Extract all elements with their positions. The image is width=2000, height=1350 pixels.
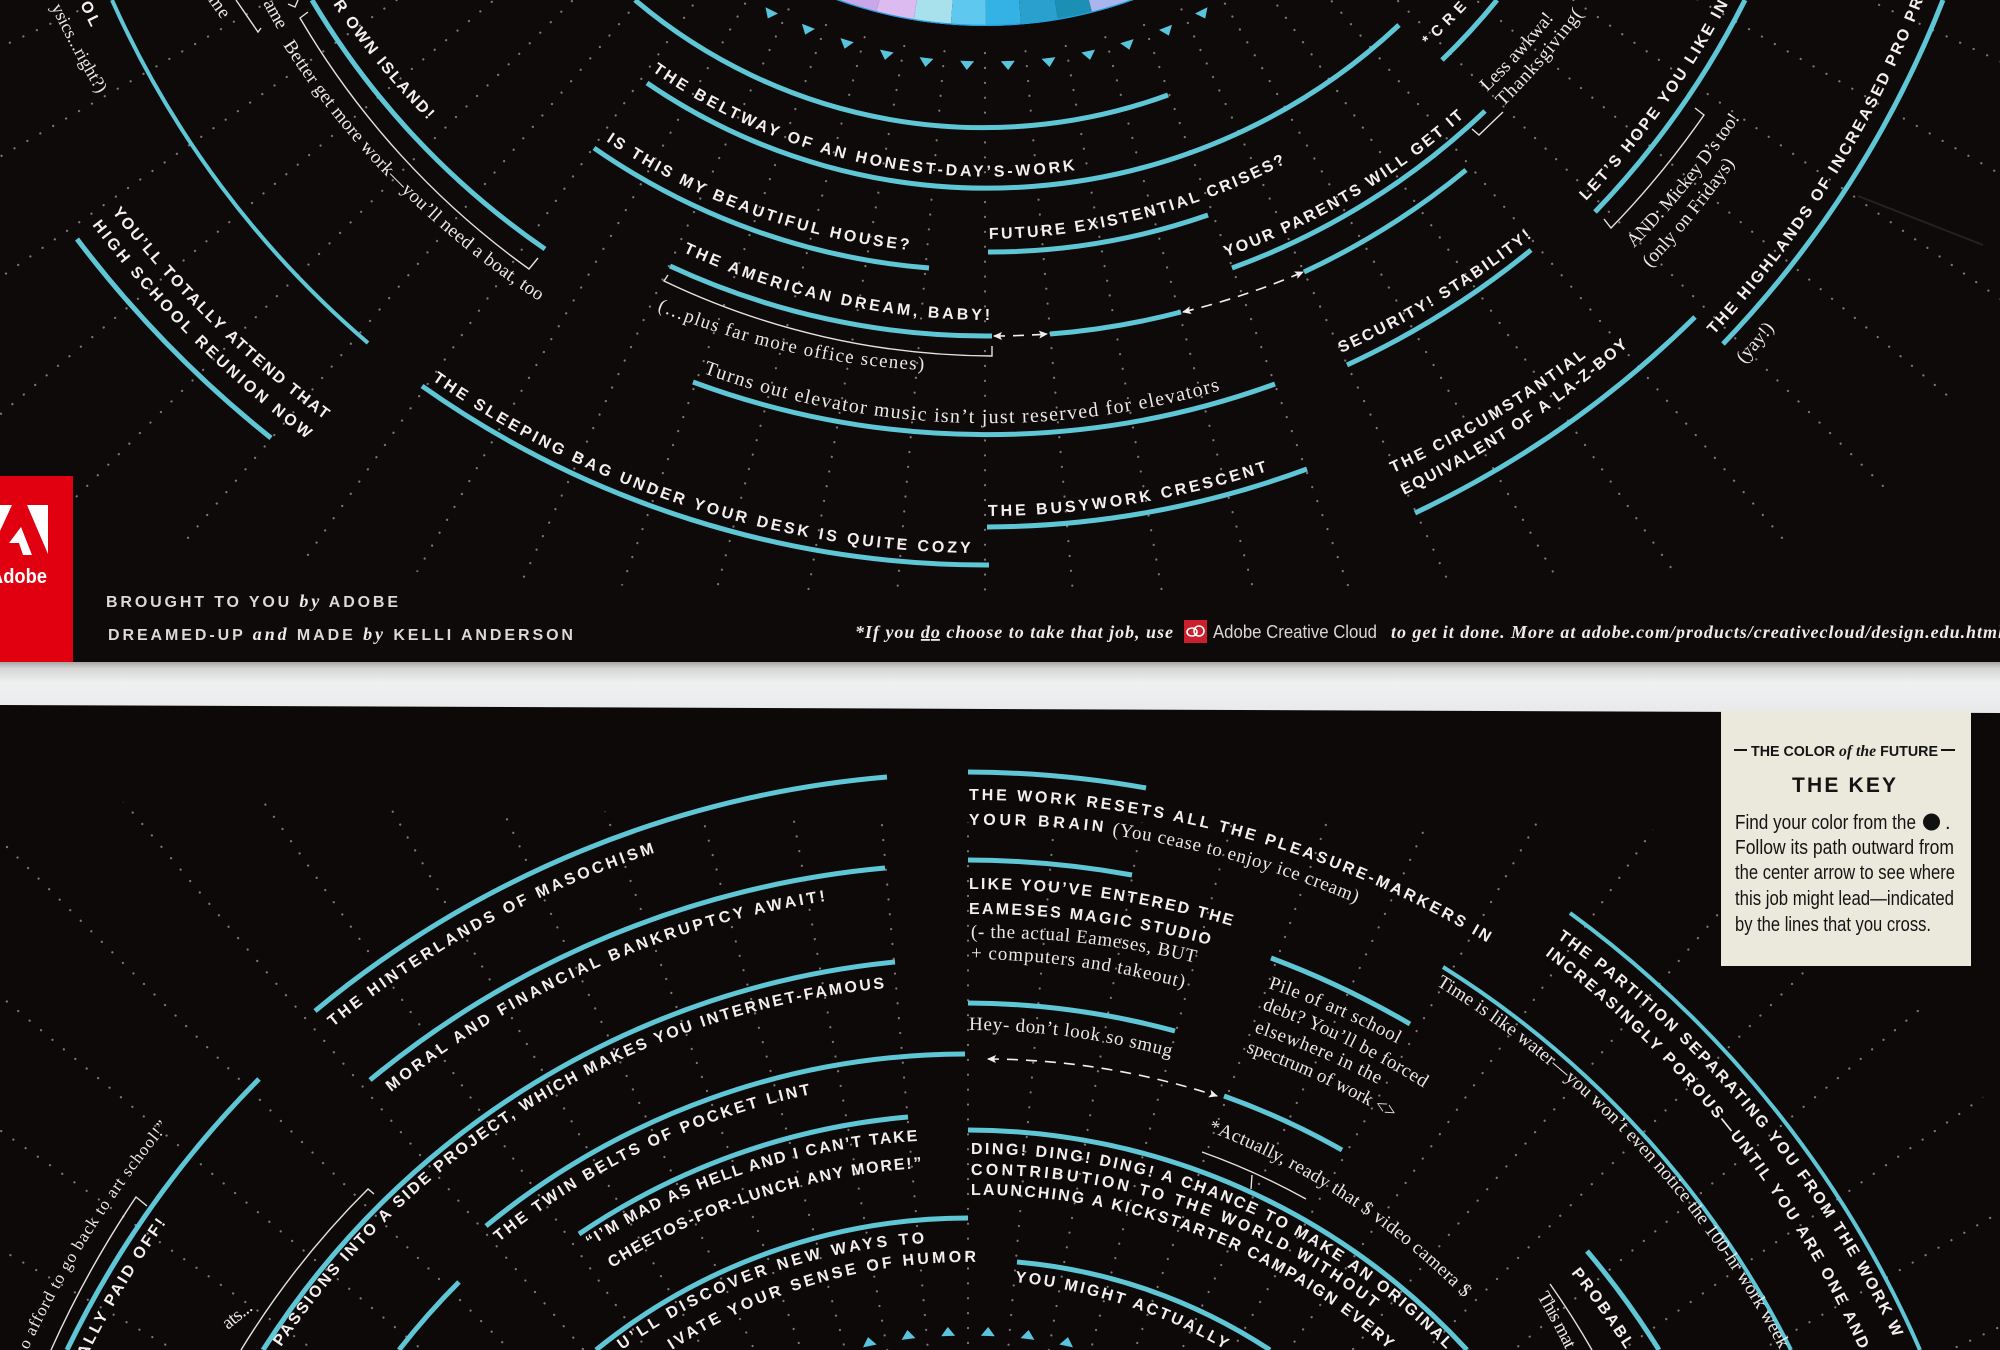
note: time is like water: Time is like water—you won’t even notice the 100-hr work week [1433,971,1794,1350]
note: office scenes: (…plus far more office scenes) [658,300,924,374]
arc: hey don't look so smug [968,1003,1175,1031]
label: your own island: R OWN ISLAND! [334,0,435,119]
label: side project: PASSIONS INTO A SIDE PROJECT, WHICH MAKES YOU INTERNET-FAMOUS [272,978,884,1346]
note: better get more work: Better get more work—you’ll need a boat, too [283,38,542,300]
credit: dreamed up and made by kelli anderson: DREAMED-UP and MADE by KELLI ANDERSON [108,624,573,644]
arc: lower right segment [1304,170,1466,272]
arc: is this my beautiful house [594,148,929,268]
label: probably: PROBABL [1568,1265,1637,1350]
arc: finally paid off [67,1079,259,1350]
label: twin belts: THE TWIN BELTS OF POCKET LINT [492,1084,808,1240]
note: ice cream: (You cease to enjoy ice cream) [1111,819,1362,908]
arc: time is like water [1443,967,1791,1350]
arc: hinterlands [315,777,887,1011]
triangle ring, lower wheel [861,1327,1075,1347]
arc: pile of art school debt [1271,958,1410,1024]
label: your parents: YOUR PARENTS WILL GET IT [1222,108,1462,256]
arc: security stability [1347,250,1531,365]
note: physics right: ysics...right?) [48,4,106,93]
footnote: if you do choose: *If you do choose to take that job, use [855,622,1173,642]
bracket: paid off note [51,1197,147,1350]
arc: let's hope [1595,0,1745,212]
arc: the work resets [968,772,1146,788]
bracket: island note [300,12,538,269]
note: video camera: *Actually, ready that $ video camera $ [1206,1116,1475,1302]
note: afford art school: o afford to go back to art school!” [22,1120,162,1348]
color wheel pie [836,0,1134,26]
label: mad as hell line two: CHEETOS-FOR-LUNCH ANY MORE!” [608,1157,920,1266]
label: your brain: YOUR BRAIN [969,812,1104,836]
label: moral bankruptcy: MORAL AND FINANCIAL BANKRUPTCY AWAIT! [385,890,824,1092]
scratch on paper [1858,196,1983,245]
label: ding line two: CONTRIBUTION TO THE WORLD WITHOUT [971,1162,1381,1312]
label: circumstantial line one: THE CIRCUMSTANTIAL [1388,352,1586,472]
arrow: dashed lower [988,1059,1217,1096]
body line 4: this job might lead—indicated [1735,888,1954,910]
label: pleasure markers: THE WORK RESETS ALL THE PLEASURE-MARKERS IN [969,789,1492,942]
bracket: small right [288,0,298,7]
label: discover line one: U’LL DISCOVER NEW WAYS TO [616,1232,924,1348]
bracket: american dream note [664,275,992,356]
arc: moral bankruptcy [370,868,885,1080]
arrow: dashed center pair [994,334,1047,336]
arc: short right [1224,1096,1342,1150]
dash left of key kicker [1734,749,1747,751]
arc: eameses studio [968,860,1132,875]
brand: adobe creative cloud: Adobe Creative Cloud [1213,622,1377,642]
label: eameses line two: EAMESES MAGIC STUDIO [969,901,1213,949]
body period: . [1945,812,1951,834]
bracket: video camera note [1202,1152,1306,1199]
note: elsewhere: elsewhere in the [1252,1017,1386,1089]
arc: circumstantial la-z-boy [1415,317,1695,513]
label: beautiful house: IS THIS MY BEAUTIFUL HOUSE? [606,132,909,250]
arc: left long line [112,0,368,343]
arc: short line at top [1442,0,1497,60]
note: mickey d's: AND: Mickey D’s too! [1629,112,1739,248]
arc: elevator music [693,382,1275,435]
note: actual eameses: (- the actual Eameses, BUT [971,922,1199,968]
background strip between the two poster panels [0,662,2000,714]
label: sleeping bag: THE SLEEPING BAG UNDER YOUR DESK IS QUITE COZY [435,371,970,553]
bracket: mickey d's note [1604,108,1704,228]
body line 5: by the lines that you cross. [1735,914,1931,936]
panel: top poster section [0,0,2000,662]
label: reunion line two: HIGH SCHOOL REUNION NOW [92,219,314,438]
arc: high school reunion [77,239,271,438]
logo: adobe red tag [0,476,73,662]
label: reunion line one: YOU’LL TOTALLY ATTEND THAT [114,206,331,418]
arc: side project [263,962,895,1350]
arc: busywork crescent [987,469,1307,527]
kicker: the color of the future: THE COLOR of the FUTURE [1751,743,1938,760]
label: eameses line one: LIKE YOU’VE ENTERED THE [969,876,1235,930]
arc: ding ding [968,1130,1467,1350]
label: hey: Hey- don’t look so smug [969,1014,1175,1062]
arc: sleeping bag [422,386,989,565]
arc: discover new ways [596,1218,968,1350]
dash right of key kicker [1941,749,1955,751]
footnote: url: to get it done. More at adobe.com/products/creativecloud/design.edu.html [1391,622,2000,642]
bracket: small left [236,0,261,32]
panel: the key card [1721,711,1971,966]
bracket: parents note [1472,112,1503,135]
arc: your parents will get it [1232,111,1485,268]
label: ding line one: DING! DING! DING! A CHANCE TO MAKE AN ORIGINAL [971,1141,1456,1350]
label: hinterlands: THE HINTERLANDS OF MASOCHISM [326,842,654,1025]
bracket: side project note [241,1189,374,1350]
arrow: dashed right pair [1183,272,1303,312]
label: ding line three: LAUNCHING A KICKSTARTER CAMPAIGN EVERY [971,1182,1397,1350]
note: only on fridays: (only on Fridays) [1644,159,1736,268]
note: cats: ats... [224,1309,252,1329]
label: mad as hell line one: “I’M MAD AS HELL AND I CAN’T TAKE [586,1130,917,1242]
arc: your own island [312,0,545,249]
body line 3: the center arrow to see where [1735,862,1955,884]
arc: american dream [670,266,992,336]
arc: mad as hell [579,1117,908,1234]
bracket: probably note [1550,1284,1592,1350]
icon: creative cloud [1184,620,1207,643]
note: debt: debt? You’ll be forced [1260,994,1432,1092]
label: american dream: THE AMERICAN DREAM, BABY! [686,242,989,320]
label: partition line two: INCREASINGLY POROUS—UNTIL YOU ARE ONE AND [1543,945,1872,1350]
body line 1: Find your color from the [1735,812,1916,834]
note: thanksgiving: Thanksgiving( [1494,6,1586,105]
label: the beltway: THE BELTWAY OF AN HONEST-DAY’S-WORK [655,62,1075,177]
label: partition line one: THE PARTITION SEPARATING YOU FROM THE WORK W [1555,927,1906,1340]
note: yay: (yay!) [1738,324,1774,364]
label: future existential crises: FUTURE EXISTENTIAL CRISES? [990,155,1282,239]
note: spectrum: spectrum of work <> [1244,1037,1400,1123]
icon: black dot [1923,814,1940,830]
label: highlands of increased pro: THE HIGHLANDS OF INCREASED PRO PR [1706,0,1923,332]
label: circumstantial line two: EQUIVALENT OF A LA-Z-BOY [1400,338,1625,494]
label: security stability: SECURITY! STABILITY! [1338,229,1531,352]
arc: twin belts [486,1054,965,1226]
label: elevator music: Turns out elevator music isn’t just reserved for elevators [706,360,1219,428]
arc: you might actually [1017,1262,1270,1350]
arc: beltway of an honest day's work [647,25,1399,188]
note: pile of art school: Pile of art school [1266,973,1405,1048]
note: less awkward: Less awkwa! [1478,12,1552,92]
arc: future existential crises [988,215,1208,252]
arc: inner beltway line [635,0,1168,128]
label: let's hope: LET’S HOPE YOU LIKE IN [1578,0,1728,200]
label: busywork crescent: THE BUSYWORK CRESCENT [988,460,1264,516]
body line 2: Follow its path outward from [1735,837,1954,859]
credit: brought to you by adobe: BROUGHT TO YOU by ADOBE [106,591,398,611]
arc: short lower left [399,1282,459,1350]
note: computers and takeout: + computers and takeout) [971,943,1188,993]
arc: the partition [1570,913,1920,1350]
triangle ring around the wheel [762,7,1211,70]
heading: the key: THE KEY [1792,774,1896,797]
arc: probably [1587,1251,1659,1350]
arc: highlands [1723,0,1943,344]
arc: center right segment [1050,312,1181,334]
